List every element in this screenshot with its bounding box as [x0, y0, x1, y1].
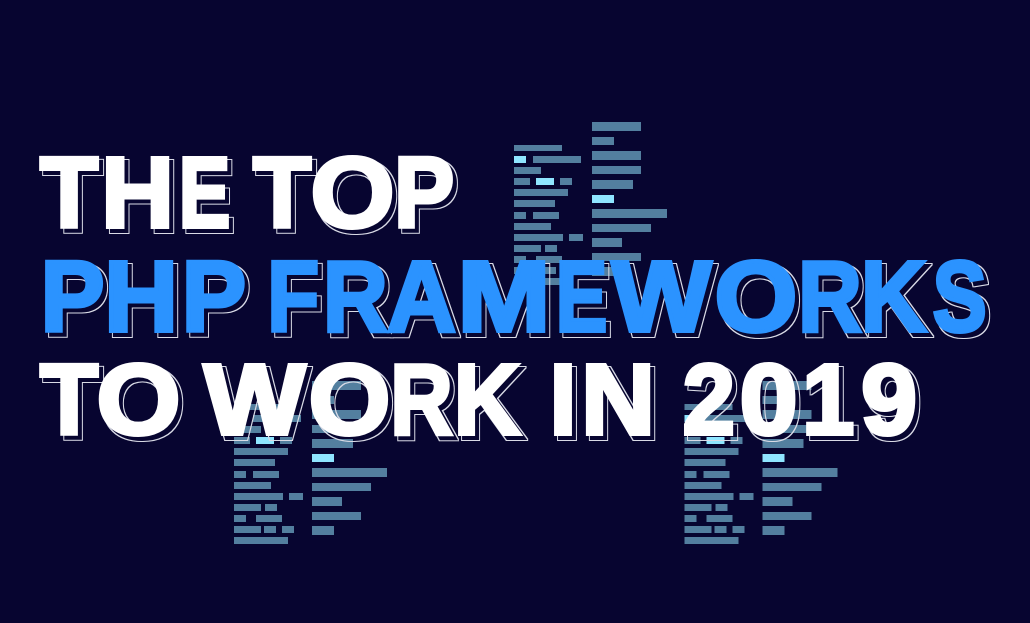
title line 2: PHP FRAMEWORKS: F — [267, 241, 319, 353]
title line 1: THE TOP: P — [394, 137, 454, 249]
title line 2: PHP FRAMEWORKS: W — [612, 241, 712, 353]
title line 3: TO WORK IN 2019: N — [581, 344, 655, 456]
title line 3: TO WORK IN 2019: 1 — [802, 344, 854, 456]
title line 3: TO WORK IN 2019: T — [40, 344, 98, 456]
title line 2: PHP FRAMEWORKS: P — [182, 241, 244, 353]
title line 2: PHP FRAMEWORKS: P — [41, 241, 104, 353]
code lines graphic: bottom left — [234, 381, 387, 544]
title line 2: PHP FRAMEWORKS: R — [323, 241, 388, 353]
title line 1: THE TOP: E — [179, 137, 230, 249]
title line 3: TO WORK IN 2019: O — [96, 344, 181, 456]
title line 2: PHP FRAMEWORKS: M — [458, 241, 550, 353]
title line 2: PHP FRAMEWORKS: A — [387, 241, 456, 353]
title line 3: TO WORK IN 2019: R — [390, 344, 453, 456]
title line 2: PHP FRAMEWORKS: O — [714, 241, 797, 353]
title line 1: THE TOP: H — [101, 137, 174, 249]
title line 3: TO WORK IN 2019: I — [550, 344, 576, 456]
code lines graphic: top — [514, 122, 667, 285]
title line 2: PHP FRAMEWORKS — [41, 241, 987, 353]
title line 1: THE TOP — [40, 137, 454, 249]
title line 2: PHP FRAMEWORKS: S — [933, 241, 987, 353]
title line 1: THE TOP: T — [40, 137, 98, 249]
title line 3: TO WORK IN 2019 — [40, 344, 917, 456]
title line 1: THE TOP: T — [253, 137, 311, 249]
title line 2: PHP FRAMEWORKS: R — [798, 241, 862, 353]
title line 1: THE TOP: O — [310, 137, 395, 249]
title line 3: TO WORK IN 2019: O — [309, 344, 390, 456]
title line 2: PHP FRAMEWORKS: H — [104, 241, 178, 353]
title line 3: TO WORK IN 2019: W — [204, 344, 306, 456]
title line 3: TO WORK IN 2019: 0 — [740, 344, 798, 456]
title line 3: TO WORK IN 2019: 2 — [683, 344, 735, 456]
title line 2: PHP FRAMEWORKS: E — [556, 241, 607, 353]
title line 3: TO WORK IN 2019: K — [454, 344, 520, 456]
code lines graphic: bottom right — [684, 381, 838, 544]
title line 3: TO WORK IN 2019: 9 — [861, 344, 917, 456]
title line 2: PHP FRAMEWORKS: K — [861, 241, 926, 353]
